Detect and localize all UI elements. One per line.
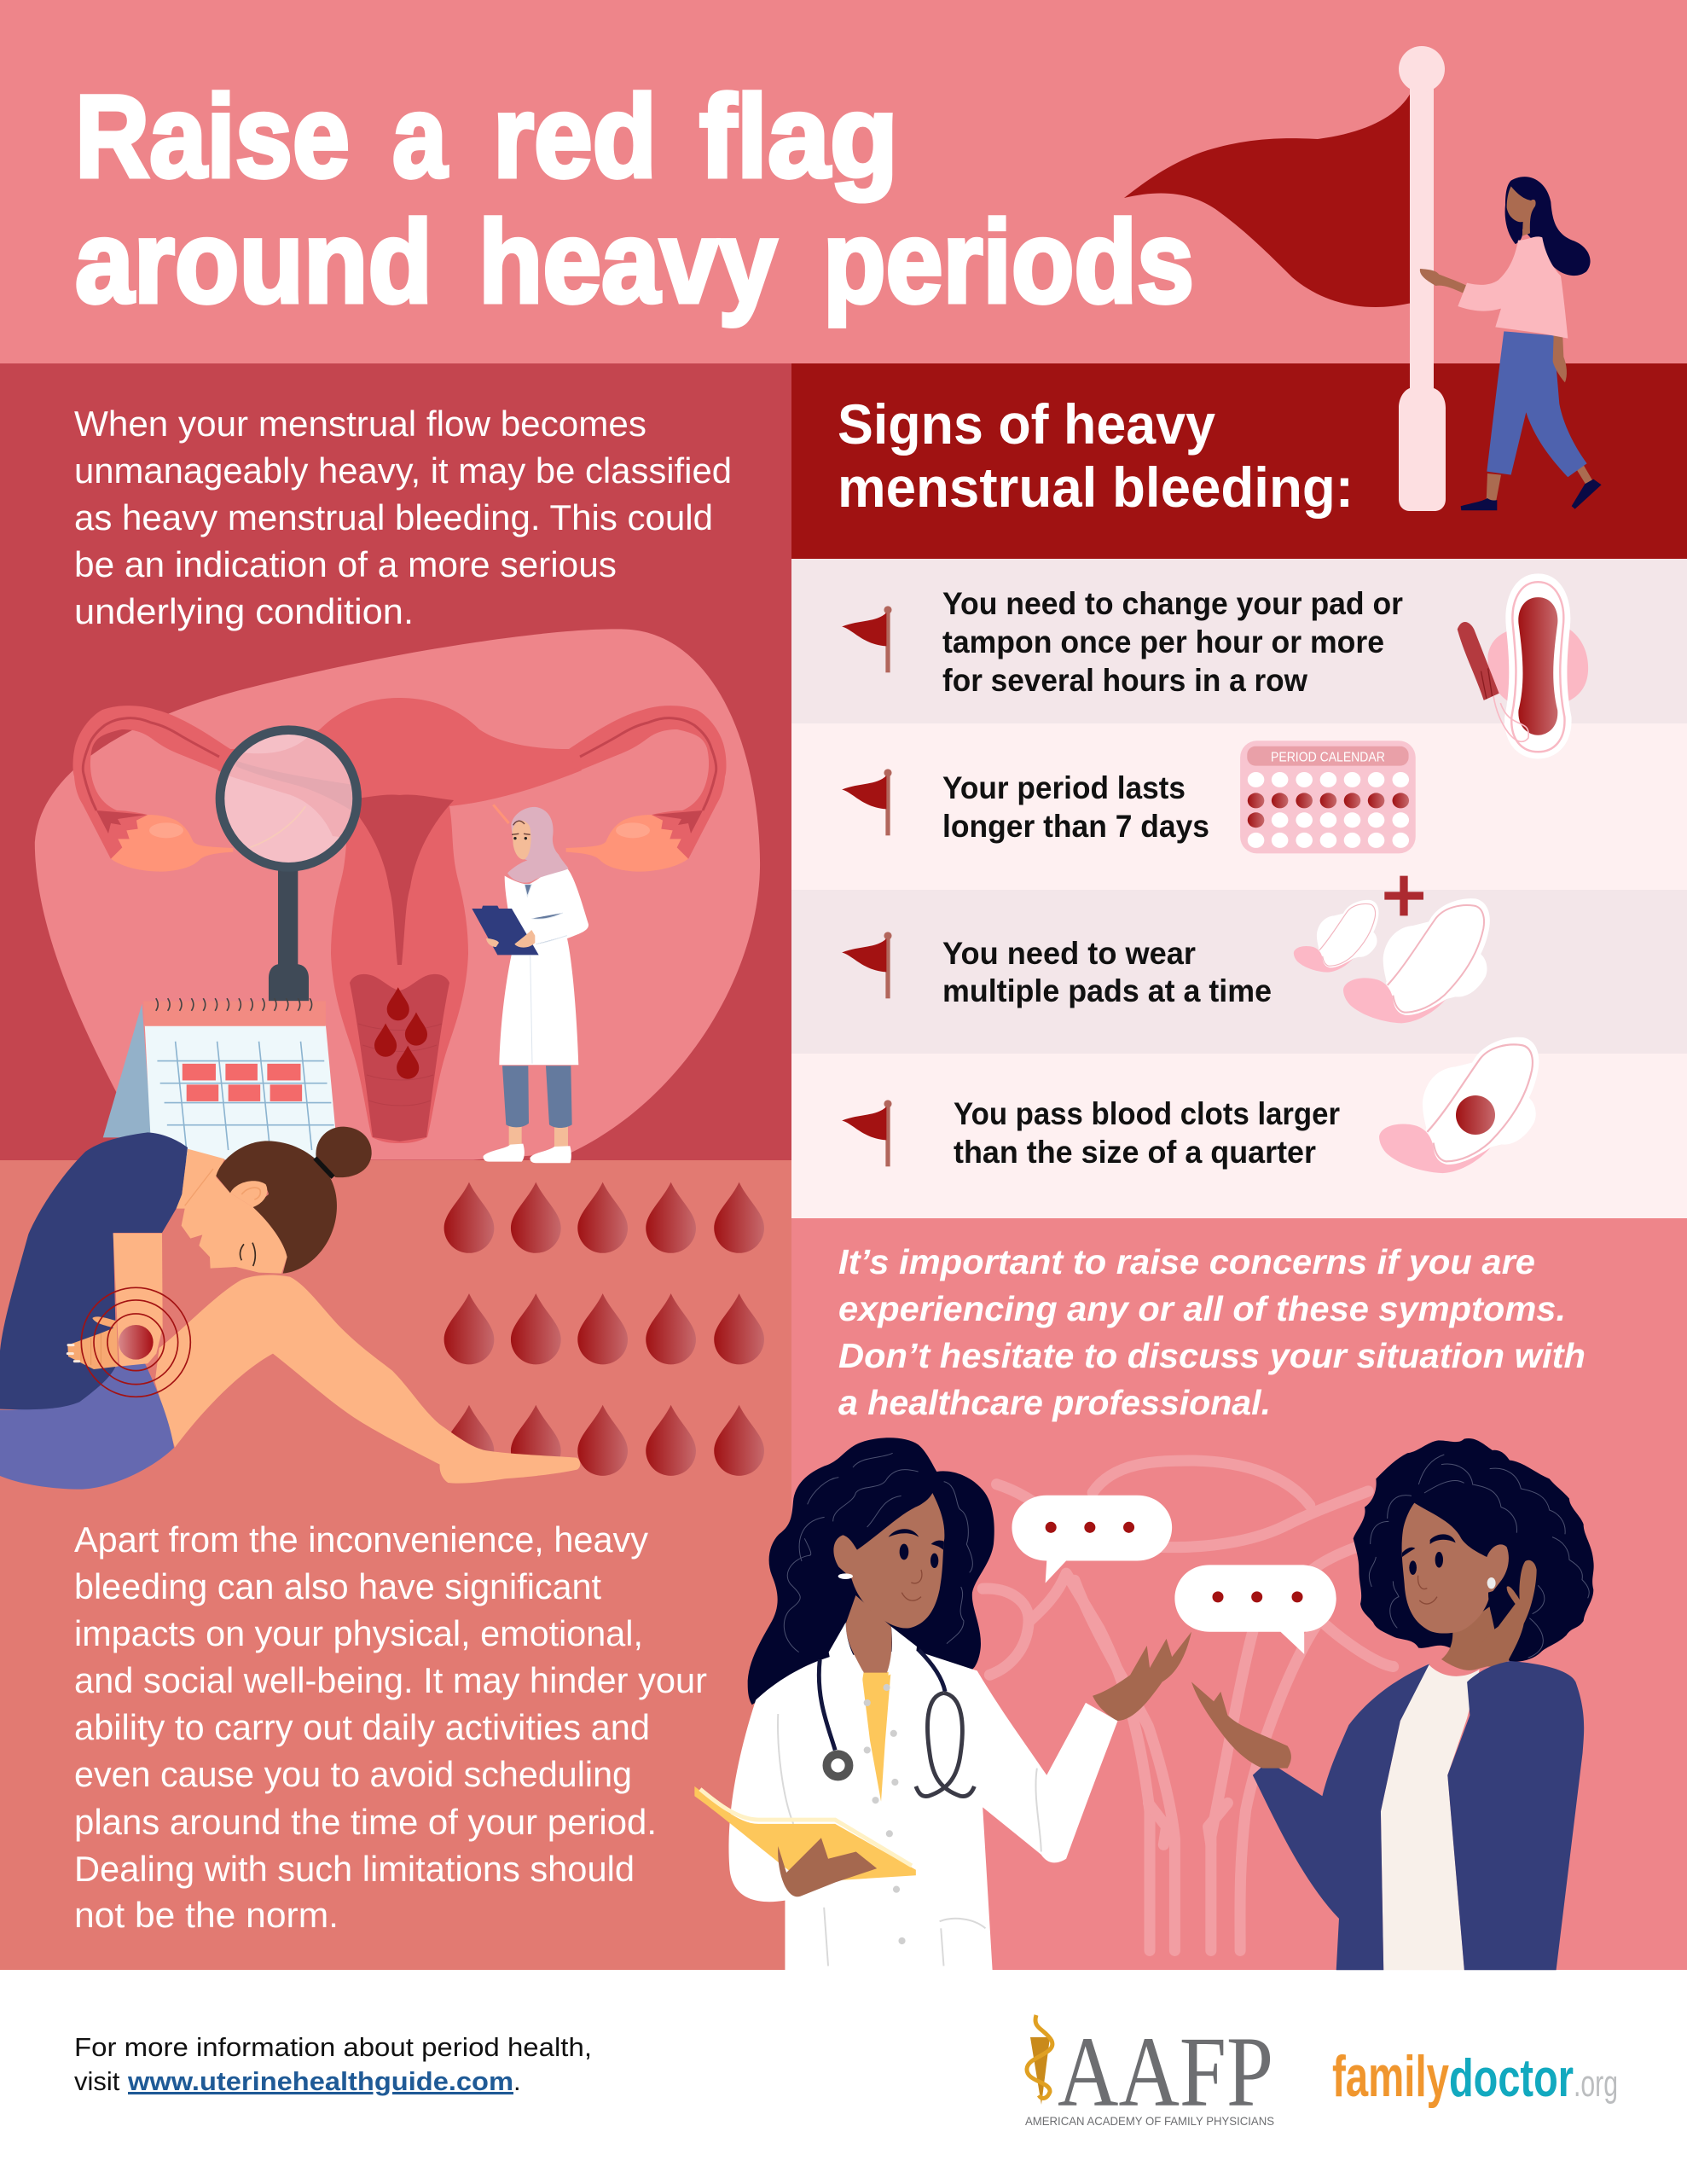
logo: familydoctor.org: family: [1332, 2044, 1449, 2109]
text: [954, 1096, 1340, 1170]
hair: [216, 1141, 337, 1274]
leg: [155, 1275, 580, 1484]
open hand: [1191, 1682, 1291, 1769]
flag pole: [1399, 81, 1446, 511]
shorts: [0, 1363, 174, 1490]
shirt: [0, 1132, 188, 1409]
header band: [0, 0, 1687, 363]
text: tampon once per hour or more: [942, 624, 1384, 659]
text: advice paragraph: Don’t hesitate to discuss your situation with: [838, 1336, 1586, 1375]
text: impact paragraph: and social well-being. It may hinder your: [74, 1660, 707, 1700]
pain rings: [81, 1287, 190, 1397]
title: flag: [699, 72, 898, 202]
ear: [230, 1181, 267, 1207]
text: [942, 770, 1209, 844]
text: impact paragraph: plans around the time of your period.: [74, 1802, 657, 1842]
stethoscope: [819, 1650, 974, 1797]
icon: two pads with plus sign: [1294, 876, 1490, 1023]
panel: sign one: [791, 559, 1687, 723]
illustration: woman with cramps: [0, 1127, 580, 1490]
text: [942, 586, 1403, 698]
title: red: [493, 72, 657, 202]
hair tie: [315, 1158, 333, 1177]
text: advice paragraph: It’s important to raise concerns if you are: [838, 1242, 1535, 1281]
text: [942, 936, 1272, 1008]
blood drops in uterus: [374, 987, 427, 1079]
icon: plus sign: [1384, 876, 1423, 915]
panel: advice background: [791, 1218, 1687, 1970]
text: intro paragraph: When your menstrual flow becomes: [74, 404, 646, 444]
hair: [748, 1438, 994, 1705]
patient: [1191, 1438, 1594, 1970]
heading: signs of heavy menstrual bleeding: Signs of heavy: [838, 392, 1215, 456]
text: than the size of a quarter: [954, 1135, 1316, 1170]
icon: pad and tampon: [1458, 573, 1588, 758]
panel: sign four: [791, 1054, 1687, 1218]
text: You need to wear: [942, 936, 1196, 971]
logo: AAFP: AAFP: [1058, 2016, 1273, 2128]
closed eyes: [241, 1243, 255, 1266]
logo: familydoctor.org: [1332, 2044, 1618, 2109]
icon: period calendar: [1240, 741, 1416, 853]
flag icon: [842, 932, 892, 998]
icons: pad, tampon, calendar: [1240, 573, 1588, 853]
text: intro paragraph: [74, 404, 732, 631]
text: footer link: For more information about period health,: [74, 2032, 592, 2062]
raised hand: [1093, 1632, 1191, 1721]
text: intro paragraph: as heavy menstrual bleeding. This could: [74, 497, 713, 537]
logo: AAFP: AMERICAN ACADEMY OF FAMILY PHYSICIANS: [1025, 2114, 1274, 2128]
speech bubble right: [1174, 1565, 1336, 1654]
flag icon: [842, 1100, 892, 1166]
title: [75, 72, 1194, 328]
curly hair: [1354, 1438, 1594, 1662]
doctor: [694, 1438, 1191, 1970]
flag icon: [842, 606, 892, 672]
text: impact paragraph: even cause you to avoid scheduling: [74, 1754, 632, 1794]
icon: red flag on pole with woman: [1124, 46, 1602, 511]
text: multiple pads at a time: [942, 973, 1272, 1008]
chart: fifteen blood drops: [444, 1182, 764, 1476]
hand: [67, 1316, 118, 1369]
text: Your period lasts: [942, 770, 1186, 805]
title: heavy: [478, 197, 777, 328]
illustration: doctor and patient conversation: [694, 1438, 1594, 1970]
book hand: [778, 1838, 877, 1896]
open book: [694, 1786, 916, 1882]
shirt: [1381, 1664, 1480, 1970]
text: You need to change your pad or: [942, 586, 1403, 621]
logo: familydoctor.org: .org: [1574, 2063, 1618, 2105]
text: footer link: [74, 2032, 592, 2096]
hair bun: [316, 1127, 372, 1177]
head and hand: [1402, 1503, 1537, 1670]
text: impact paragraph: impacts on your physical, emotional,: [74, 1613, 643, 1653]
title: around: [75, 197, 432, 328]
text: for several hours in a row: [942, 663, 1307, 698]
panel: left lower background: [0, 1160, 791, 1970]
text: You pass blood clots larger: [954, 1096, 1340, 1131]
icon: small pad: [1294, 900, 1379, 973]
flag cloth: [1124, 91, 1412, 307]
text: impact paragraph: ability to carry out daily activities and: [74, 1707, 650, 1747]
text: footer link: .: [513, 2066, 521, 2096]
text: impact paragraph: Dealing with such limitations should: [74, 1849, 635, 1889]
flag icon: [842, 769, 892, 835]
icon: pad with clot: [1379, 1037, 1539, 1173]
pole top knob: [1399, 46, 1445, 92]
text: intro paragraph: unmanageably heavy, it may be classified: [74, 450, 732, 491]
icon: large pad: [1343, 898, 1490, 1023]
woman walking: [1420, 177, 1602, 510]
panel: left intro background: [0, 363, 791, 1160]
text: intro paragraph: be an indication of a more serious: [74, 544, 617, 584]
text: footer link: www.uterinehealthguide.com: [127, 2066, 513, 2096]
panel: footer background: [0, 1970, 1687, 2184]
logo: familydoctor.org: doctor: [1449, 2049, 1574, 2108]
ghost uterus outline: [983, 1461, 1394, 1950]
title: a: [392, 72, 449, 202]
coat: [728, 1650, 1117, 1970]
text: footer link: visit: [74, 2066, 120, 2096]
heading: signs of heavy menstrual bleeding: menstrual bleeding:: [838, 456, 1354, 519]
text: intro paragraph: underlying condition.: [74, 591, 414, 631]
text: advice paragraph: experiencing any or all of these symptoms.: [838, 1289, 1566, 1328]
title: periods: [823, 197, 1194, 328]
text: longer than 7 days: [942, 809, 1209, 844]
text: impact paragraph: bleeding can also have significant: [74, 1566, 601, 1606]
background blob: [35, 629, 760, 1159]
head and collar: [829, 1493, 944, 1686]
text: impact paragraph: Apart from the inconvenience, heavy: [74, 1519, 648, 1560]
face and neck: [177, 1149, 287, 1274]
calendar: [103, 998, 339, 1159]
text: advice paragraph: [838, 1242, 1586, 1422]
text: advice paragraph: a healthcare professional.: [838, 1383, 1271, 1422]
panel: sign three: [791, 890, 1687, 1054]
uterus: [73, 698, 727, 1143]
text: impact paragraph: not be the norm.: [74, 1895, 339, 1935]
magnifying glass: [219, 728, 361, 1001]
staff icon: [1027, 2015, 1052, 2105]
small doctor in hijab: [472, 804, 588, 1163]
text: impact paragraph: [74, 1519, 707, 1935]
panel: sign two: [791, 723, 1687, 890]
jacket: [1253, 1661, 1584, 1970]
title: Raise: [75, 72, 350, 202]
illustration: uterus scene: [35, 629, 760, 1163]
panel: signs heading background: [791, 363, 1687, 559]
icon: period calendar: PERIOD CALENDAR: [1271, 751, 1385, 765]
heading: signs of heavy menstrual bleeding: [838, 392, 1354, 519]
arm: [113, 1234, 163, 1367]
speech bubble left: [1012, 1496, 1172, 1583]
